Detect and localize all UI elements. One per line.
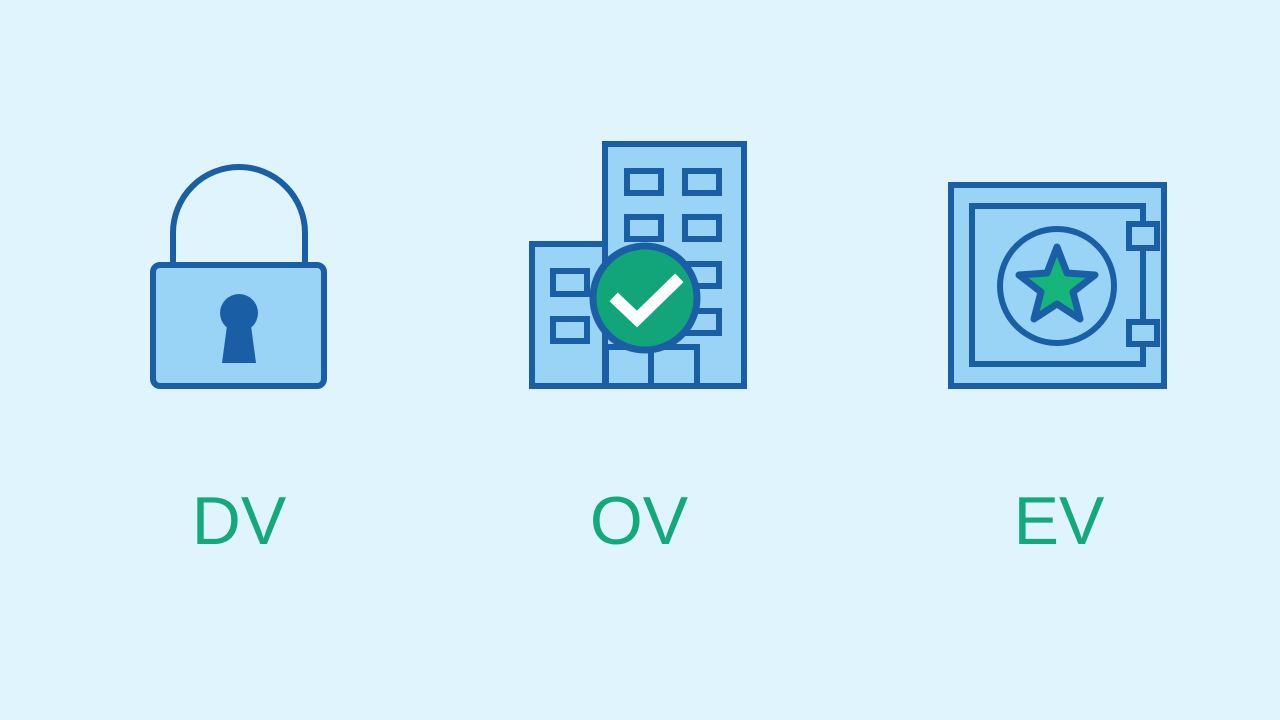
label: EV: EV — [1014, 483, 1105, 559]
label: DV: DV — [192, 483, 287, 559]
icon: safe with star — [951, 185, 1164, 386]
icon: padlock — [153, 167, 324, 386]
label: OV: OV — [590, 483, 689, 559]
icon: building with check — [532, 144, 744, 386]
